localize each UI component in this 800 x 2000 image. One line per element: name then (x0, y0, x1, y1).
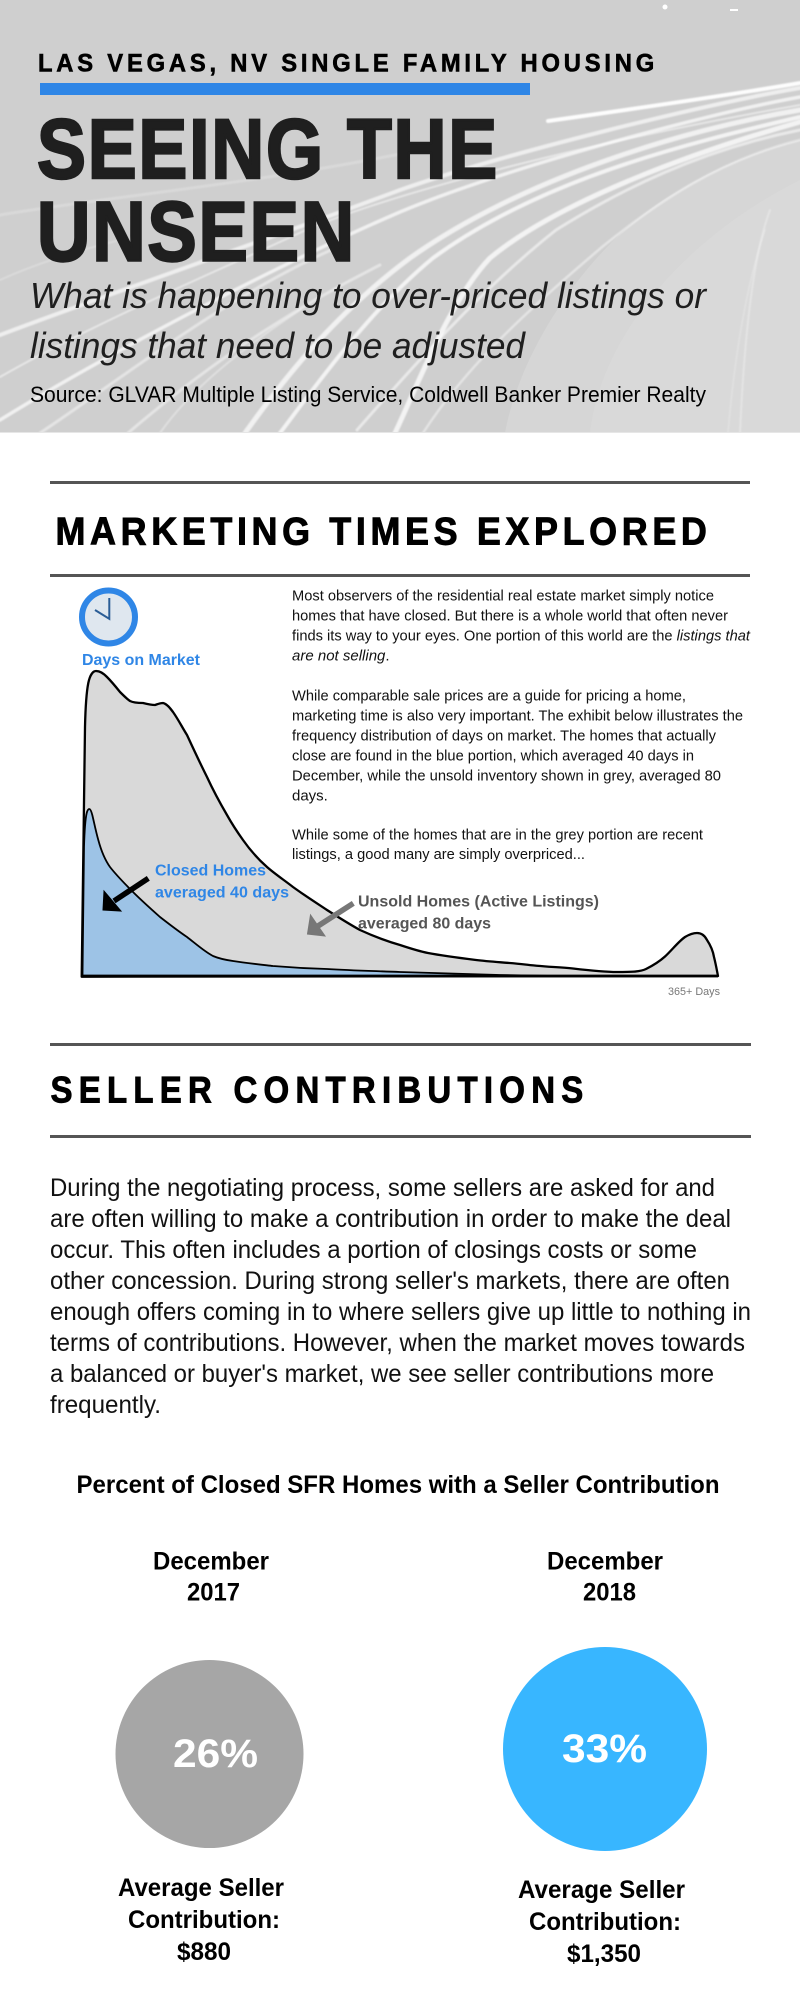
average contribution 2017 (118, 1874, 284, 1966)
italic subtitle: What is happening to over-priced listings or (30, 275, 708, 316)
column: december 2017 (116, 1548, 304, 1966)
eyebrow heading: LAS VEGAS, NV SINGLE FAMILY HOUSING (38, 50, 658, 78)
date label 2018: 2018 (583, 1578, 636, 1606)
average contribution 2018: Average Seller (518, 1876, 685, 1904)
text block: marketing explanation: listings, a good many are simply overpriced... (292, 846, 585, 863)
text block: marketing explanation: are not selling. (292, 648, 390, 664)
italic subtitle (30, 275, 708, 366)
clock label: Days on Market (82, 652, 201, 669)
text block: marketing explanation: Most observers of the residential real estate market simply notice (292, 588, 714, 604)
circle stat 26% (116, 1660, 304, 1848)
chart heading: Percent of Closed SFR Homes with a Seller Contribution (76, 1471, 720, 1499)
icon: clock (82, 590, 135, 644)
circle stat 33%: 33% (562, 1727, 647, 1771)
panel: hero header (0, 0, 800, 433)
text block: marketing explanation: While comparable sale prices are a guide for pricing a home, (292, 688, 686, 704)
text block: marketing explanation: marketing time is also very important. The exhibit below illustrates the (292, 708, 743, 724)
text block: contributions explanation: enough offers coming in to where sellers give up little to nothing in (50, 1298, 751, 1326)
average contribution 2018 (518, 1876, 685, 1968)
average contribution 2017: $880 (177, 1938, 231, 1966)
text block: contributions explanation: frequently. (50, 1391, 161, 1419)
text block: contributions explanation: other concession. During strong seller's markets, there are often (50, 1267, 730, 1295)
text block: marketing explanation: finds its way to your eyes. One portion of this world are the listings that (292, 628, 751, 644)
average contribution 2018: Contribution: (529, 1908, 681, 1936)
text block: marketing explanation (292, 588, 751, 863)
average contribution 2018: $1,350 (567, 1940, 641, 1968)
blue accent bar (40, 83, 530, 95)
panel: seller contributions (50, 1043, 751, 1968)
italic subtitle: listings that need to be adjusted (30, 325, 526, 366)
axis label: 365+ Days (668, 986, 720, 998)
date label 2018: December (547, 1548, 663, 1576)
label: unsold homes: Unsold Homes (Active Listings) (358, 894, 599, 910)
text block: marketing explanation: homes that have closed. But there is a whole world that often never (292, 608, 728, 624)
label: closed homes: Closed Homes (155, 862, 266, 880)
hero background: grey highway light trails (0, 0, 800, 433)
date label 2017 (153, 1548, 269, 1606)
circle stat 26%: 26% (173, 1732, 258, 1776)
text block: contributions explanation: terms of contributions. However, when the market moves towards (50, 1329, 745, 1357)
text block: contributions explanation: During the negotiating process, some sellers are asked for and (50, 1174, 715, 1202)
average contribution 2017: Average Seller (118, 1874, 284, 1902)
label: closed homes (155, 862, 289, 902)
main title (37, 102, 499, 278)
text block: marketing explanation: close are found in the blue portion, which averaged 40 days in (292, 748, 694, 764)
column: december 2018 (503, 1548, 707, 1968)
label: unsold homes (358, 894, 599, 932)
date label 2017: 2017 (187, 1578, 240, 1606)
text block: marketing explanation: While some of the homes that are in the grey portion are recent (292, 826, 704, 844)
arrow: closed homes (103, 878, 148, 911)
text block: contributions explanation (50, 1174, 751, 1419)
main title: UNSEEN (37, 184, 356, 278)
section heading: seller contributions: SELLER CONTRIBUTIONS (50, 1070, 590, 1110)
panel: marketing times explored (50, 481, 751, 998)
arrow: unsold homes (308, 903, 353, 936)
label: closed homes: averaged 40 days (155, 884, 289, 902)
text block: contributions explanation: occur. This often includes a portion of closings costs or some (50, 1236, 697, 1264)
date label 2018 (547, 1548, 663, 1606)
average contribution 2017: Contribution: (128, 1906, 280, 1934)
text block: contributions explanation: are often willing to make a contribution in order to make the deal (50, 1205, 731, 1233)
label: unsold homes: averaged 80 days (358, 916, 491, 932)
text block: marketing explanation: frequency distribution of days on market. The homes that actually (292, 728, 716, 744)
section heading: marketing times: MARKETING TIMES EXPLORED (56, 510, 712, 554)
main title: SEEING THE (37, 102, 499, 196)
text block: contributions explanation: a balanced or buyer's market, we see seller contributions more (50, 1360, 714, 1388)
circle stat 33% (503, 1647, 707, 1851)
date label 2017: December (153, 1548, 269, 1576)
area chart: days on market distribution (81, 671, 718, 977)
source line: Source: GLVAR Multiple Listing Service, Coldwell Banker Premier Realty (30, 382, 706, 407)
text block: marketing explanation: days. (292, 788, 328, 804)
text block: marketing explanation: December, while the unsold inventory shown in grey, averaged 80 (292, 768, 721, 784)
